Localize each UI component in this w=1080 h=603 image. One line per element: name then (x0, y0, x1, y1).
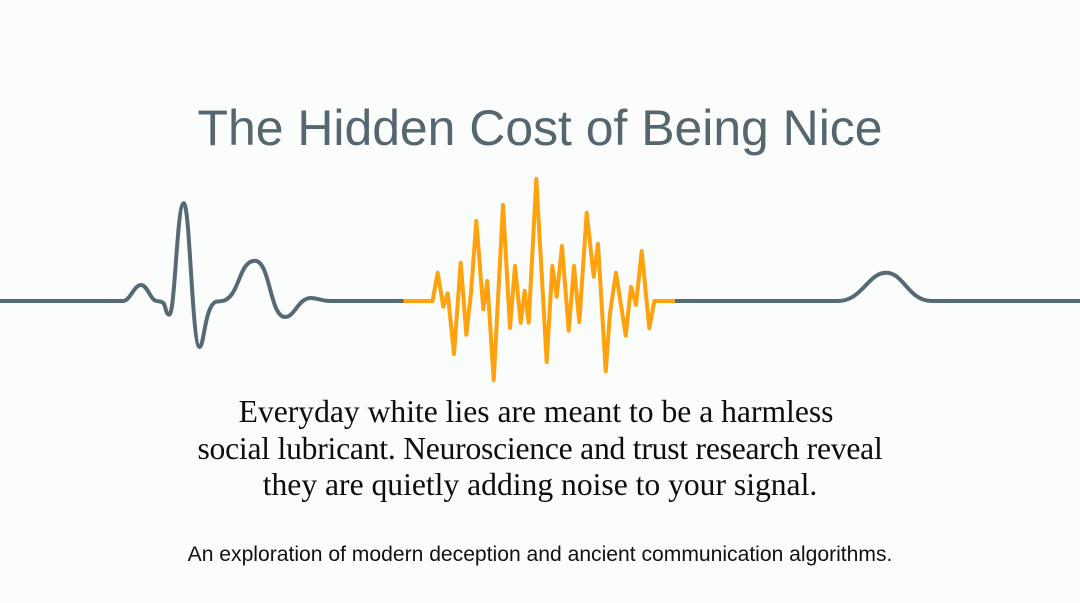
noise waveform: white lies (404, 179, 676, 380)
body text: Everyday white lies are meant to be a harmless (239, 394, 833, 429)
subtitle: An exploration of modern deception and ancient communication algorithms. (188, 543, 892, 566)
body text: social lubricant. Neuroscience and trust research reveal (197, 430, 883, 466)
body text: they are quietly adding noise to your signal. (263, 467, 817, 502)
recovery waveform: clean signal with single bump (675, 273, 1080, 301)
title: The Hidden Cost of Being Nice (198, 100, 882, 156)
body text (197, 394, 883, 502)
heartbeat waveform: clean signal (0, 203, 404, 347)
